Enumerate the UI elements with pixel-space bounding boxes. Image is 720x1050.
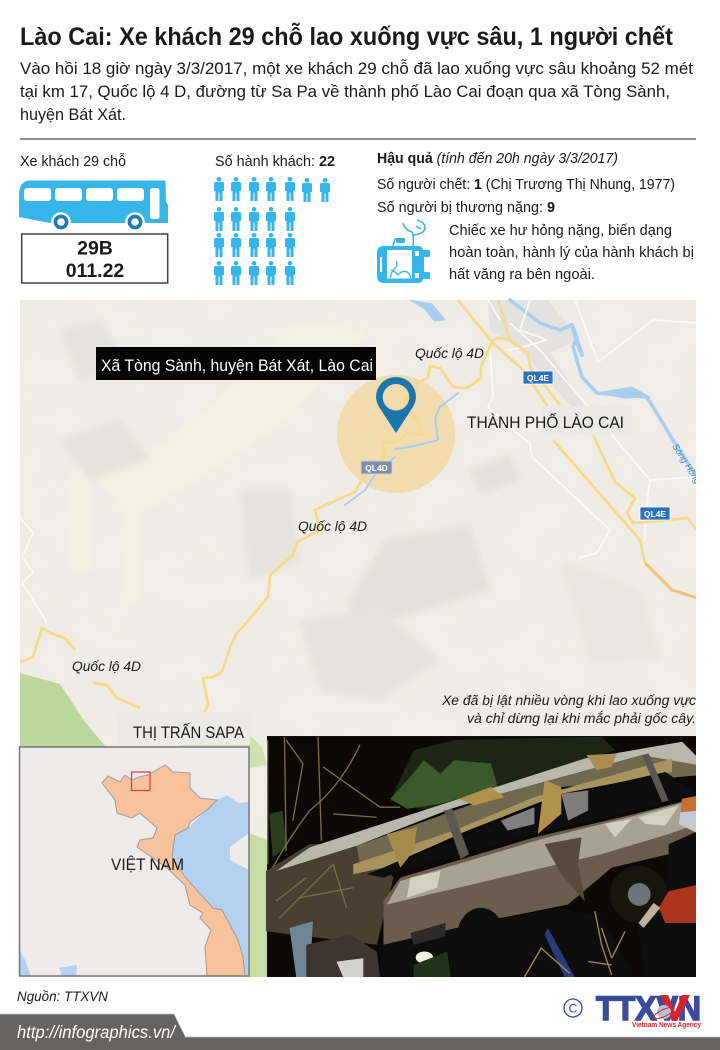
commune label — [96, 347, 376, 380]
city area — [488, 300, 600, 430]
city label: THÀNH PHỐ LÀO CAI — [467, 412, 624, 432]
panel: consequences — [377, 151, 694, 283]
sea — [172, 795, 249, 976]
intro text: tại km 17, Quốc lộ 4 D, đường từ Sa Pa về thành phố Lào Cai đoạn qua xã Tòng Sành, — [20, 83, 670, 101]
panel: map — [20, 300, 703, 977]
icon: 22 passengers — [214, 177, 330, 285]
deaths: Số người chết: 1 (Chị Trương Thị Nhung, 1977) — [377, 177, 675, 193]
photo caption: Xe đã bị lật nhiều vòng khi lao xuống vực — [441, 693, 696, 708]
panel: passengers — [214, 154, 335, 285]
sapa label — [118, 712, 250, 745]
logo: copyright and TTXVN: Vietnam News Agency — [632, 1020, 702, 1029]
road labels: Quốc lộ 4D — [298, 518, 367, 534]
inset map: Vietnam — [20, 747, 249, 976]
intro text: huyện Bát Xát. — [20, 106, 126, 124]
accident area circle — [337, 375, 455, 493]
road badges: QL4E — [644, 509, 666, 519]
panel: vehicle — [19, 153, 168, 283]
licence plate: 29B — [77, 238, 113, 260]
sapa label: THỊ TRẤN SAPA — [133, 723, 245, 742]
logo: copyright and TTXVN: C — [569, 1002, 578, 1016]
icon: bus — [19, 180, 168, 232]
motorway segment — [645, 563, 697, 598]
photo caption: và chỉ dừng lại khi mắc phải gốc cây. — [467, 711, 696, 726]
road labels: Quốc lộ 4D — [72, 658, 141, 674]
Vietnam territory — [102, 765, 245, 976]
road badges: QL4D — [365, 463, 388, 473]
forest areas — [20, 673, 267, 977]
road labels — [65, 345, 484, 682]
damage description — [449, 223, 694, 283]
licence plate — [22, 234, 168, 283]
road labels: Quốc lộ 4D — [415, 345, 484, 361]
intro text: Vào hồi 18 giờ ngày 3/3/2017, một xe khách 29 chỗ đã lao xuống vực sâu khoảng 52 mét — [20, 59, 693, 78]
national roads — [20, 300, 697, 717]
damage description: hoàn toàn, hành lý của hành khách bị — [449, 245, 694, 261]
locator square — [132, 772, 150, 790]
country label: VIỆT NAM — [111, 855, 184, 874]
title: Lào Cai: Xe khách 29 chỗ lao xuống vực sâu, 1 người chết — [20, 21, 674, 51]
commune label: Xã Tòng Sành, huyện Bát Xát, Lào Cai — [101, 356, 373, 375]
road badges — [361, 371, 670, 520]
photo: wrecked bus — [266, 736, 699, 977]
consequences heading: Hậu quả (tính đến 20h ngày 3/3/2017) — [377, 151, 618, 167]
road badges: QL4E — [527, 373, 549, 383]
icon: wrecked bus — [377, 220, 430, 283]
photo caption — [441, 693, 696, 726]
intro text — [20, 59, 693, 124]
logo: copyright and TTXVN: TTXVN — [596, 990, 701, 1028]
river — [345, 300, 697, 505]
footer band — [0, 1014, 720, 1050]
passengers label: Số hành khách: 22 — [215, 154, 335, 170]
city label — [467, 406, 632, 434]
song hong label: Sông Hồng — [670, 442, 703, 485]
damage description: hất văng ra bên ngoài. — [449, 267, 595, 283]
source: Nguồn: TTXVN — [17, 988, 109, 1004]
vehicle label: Xe khách 29 chỗ — [20, 153, 126, 170]
minor roads — [20, 300, 697, 623]
website url: http://infographics.vn/ — [17, 1022, 177, 1042]
licence plate: 011.22 — [66, 260, 124, 282]
icon: location pin — [376, 377, 416, 433]
injuries: Số người bị thương nặng: 9 — [377, 200, 555, 216]
damage description: Chiếc xe hư hỏng nặng, biến dạng — [449, 223, 672, 239]
